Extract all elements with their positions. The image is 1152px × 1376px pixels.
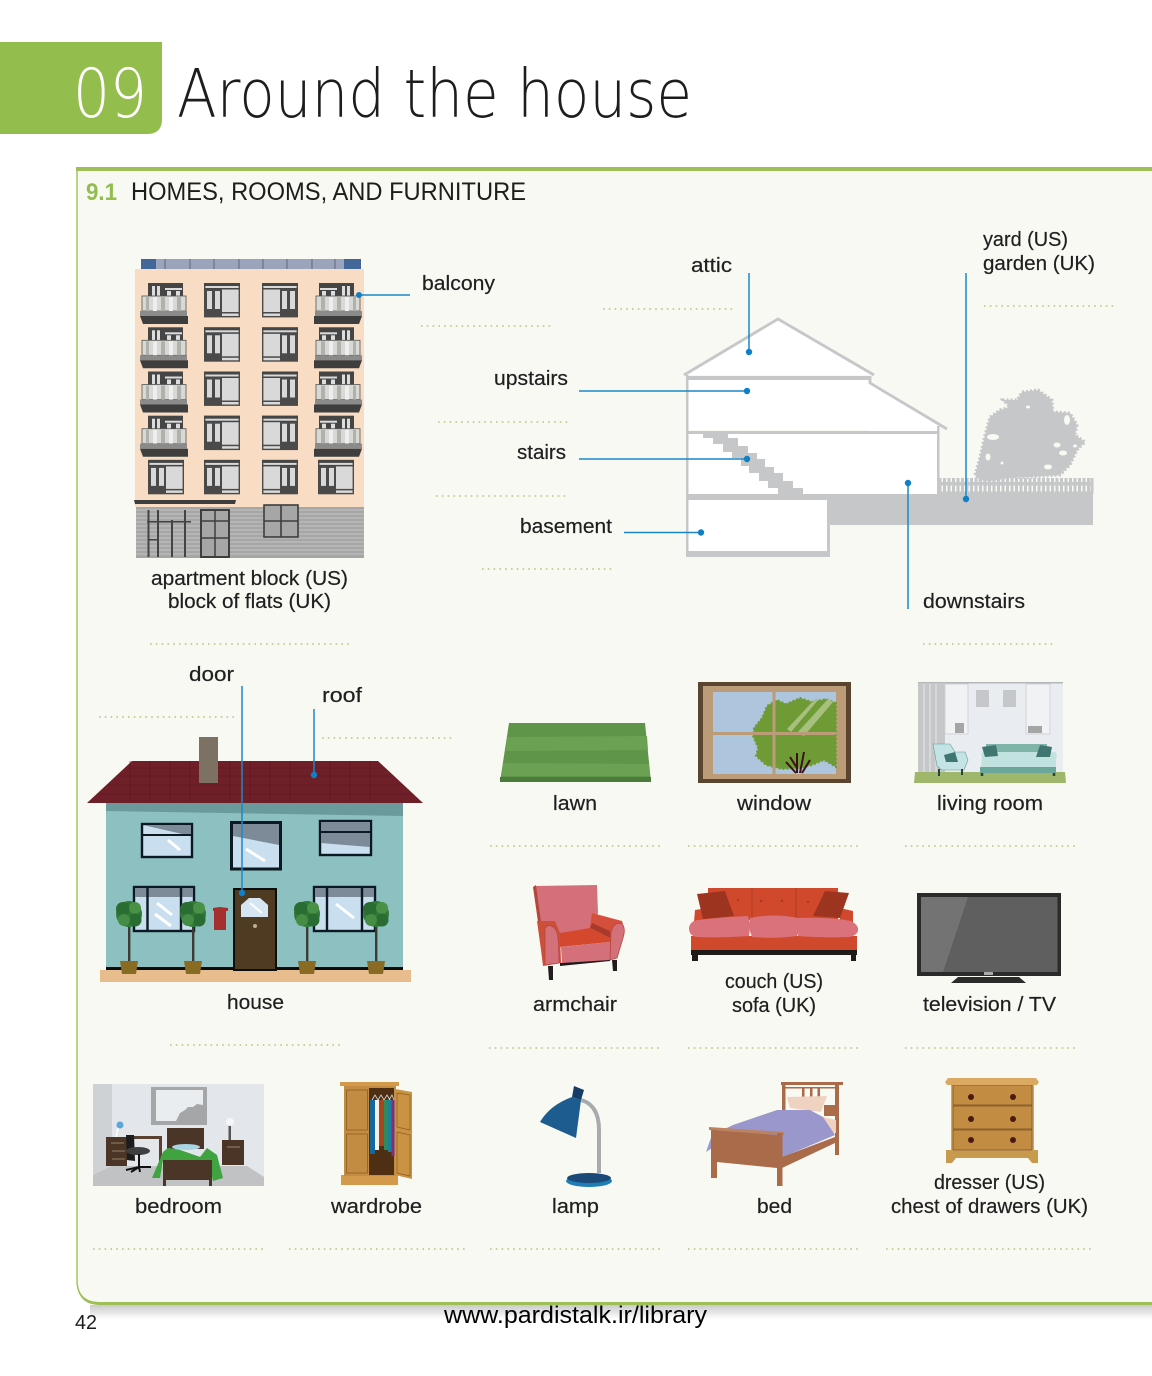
upper left window (142, 824, 192, 857)
illustration: lawn (500, 723, 651, 782)
label: apartment block (151, 568, 348, 613)
pointer: roof (311, 709, 317, 778)
illustration: armchair (533, 885, 624, 980)
upper right window (320, 821, 371, 855)
tree silhouette (975, 390, 1085, 480)
label: couch / sofa: sofa (UK) (732, 995, 816, 1017)
illustration: house (87, 737, 423, 982)
panel top border (76, 167, 1152, 171)
small armchair (933, 744, 968, 776)
page number: 42 (75, 1312, 97, 1334)
office chair (126, 1135, 151, 1172)
label: armchair: armchair (533, 994, 617, 1016)
label: television: television / TV (923, 994, 1057, 1016)
illustration: apartment block (134, 259, 364, 558)
section heading: 9.1 (86, 179, 117, 206)
label: attic: attic (691, 255, 732, 277)
illustration: television (917, 893, 1061, 983)
label: yard / garden (983, 229, 1095, 275)
label: roof: roof (322, 685, 363, 707)
label: dresser / chest of drawers: dresser (US) (934, 1172, 1045, 1194)
label: house: house (227, 992, 284, 1014)
panel bottom border (77, 1280, 1152, 1305)
title: Around the house (177, 55, 692, 133)
pointer: downstairs (905, 480, 911, 609)
illustration: living room (914, 682, 1066, 783)
label: door: door (189, 664, 234, 686)
label: dresser / chest of drawers: chest of drawers (UK) (891, 1196, 1088, 1218)
label: dresser / chest of drawers (891, 1172, 1088, 1218)
chapter number tab (0, 42, 162, 134)
illustration: bedroom (93, 1084, 264, 1186)
label: basement: basement (520, 516, 612, 538)
nightstand (222, 1118, 244, 1165)
label: window: window (736, 793, 812, 815)
label: wardrobe: wardrobe (330, 1196, 422, 1218)
pointer: door (239, 686, 245, 896)
pointer: attic (746, 273, 752, 355)
pointer: stairs (579, 456, 750, 462)
bed (152, 1128, 223, 1186)
panel shadow (90, 1305, 1152, 1319)
illustration: dresser (945, 1078, 1039, 1163)
fence (938, 478, 1093, 494)
lower right window (314, 887, 375, 931)
section heading: HOMES, ROOMS, AND FURNITURE (131, 178, 526, 206)
illustration: sofa (689, 888, 858, 961)
upper centre window (232, 822, 280, 869)
label: lamp: lamp (552, 1196, 599, 1218)
label: lawn: lawn (553, 793, 597, 815)
illustration: window (698, 682, 851, 783)
hanging clothes (370, 1095, 394, 1156)
lower left window (134, 887, 194, 931)
mailbox (213, 907, 228, 930)
illustration: lamp (540, 1086, 612, 1187)
pointer: upstairs (579, 388, 750, 394)
website url: www.pardistalk.ir/library (443, 1302, 707, 1329)
panel: homes, rooms, and furniture (77, 169, 1152, 1303)
label: yard / garden: garden (UK) (983, 253, 1095, 275)
label: balcony: balcony (422, 273, 495, 295)
label: living room: living room (937, 793, 1043, 815)
door (234, 889, 276, 970)
label: apartment block: apartment block (US) (151, 568, 348, 590)
illustration: bed (706, 1082, 843, 1186)
label: yard / garden: yard (US) (983, 229, 1068, 251)
label: downstairs: downstairs (923, 591, 1025, 613)
label: upstairs: upstairs (494, 368, 568, 390)
pointer: balcony (356, 292, 410, 298)
label: bed: bed (757, 1196, 792, 1218)
illustration: house cross-section (684, 319, 1093, 557)
illustration: wardrobe (340, 1082, 412, 1185)
pointer: yard (963, 273, 969, 502)
label: couch / sofa: couch (US) (725, 971, 823, 993)
chapter number tab: 09 (73, 55, 147, 134)
desk (106, 1122, 162, 1166)
small sofa (980, 744, 1057, 776)
pointer: basement (624, 529, 704, 536)
label: apartment block: block of flats (UK) (168, 591, 331, 613)
label: bedroom: bedroom (135, 1196, 222, 1218)
label: stairs: stairs (517, 442, 566, 464)
write-in dotted lines (93, 306, 1114, 1249)
label: couch / sofa (725, 971, 823, 1017)
